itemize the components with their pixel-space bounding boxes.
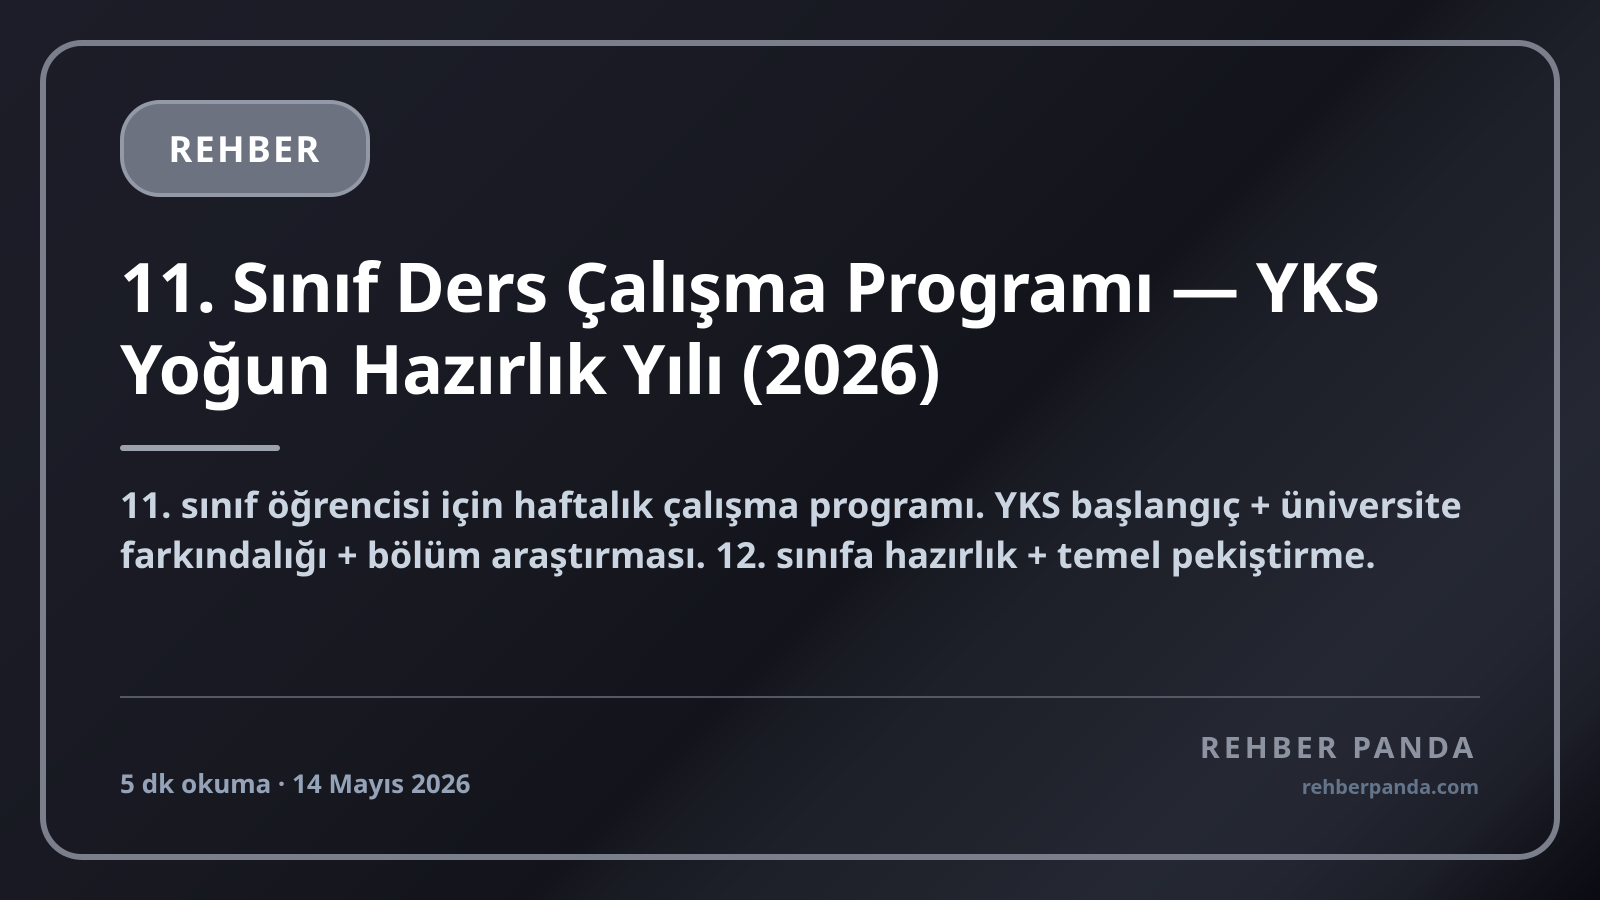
title: 11. Sınıf Ders Çalışma Programı — YKS — [120, 239, 1380, 332]
footer divider — [120, 696, 1480, 698]
reading time and date: 5 dk okuma · 14 Mayıs 2026 — [120, 765, 470, 801]
website: rehberpanda.com — [1302, 773, 1479, 800]
accent rule — [120, 445, 280, 451]
title: Yoğun Hazırlık Yılı (2026) — [120, 321, 940, 414]
subtitle — [120, 480, 1462, 579]
title — [120, 239, 1380, 414]
brand name: REHBER PANDA — [1200, 726, 1477, 767]
subtitle: 11. sınıf öğrencisi için haftalık çalışma programı. YKS başlangıç + üniversite — [120, 480, 1462, 529]
subtitle: farkındalığı + bölüm araştırması. 12. sınıfa hazırlık + temel pekiştirme. — [120, 530, 1376, 579]
badge: REHBER — [169, 124, 321, 173]
badge — [120, 100, 370, 197]
